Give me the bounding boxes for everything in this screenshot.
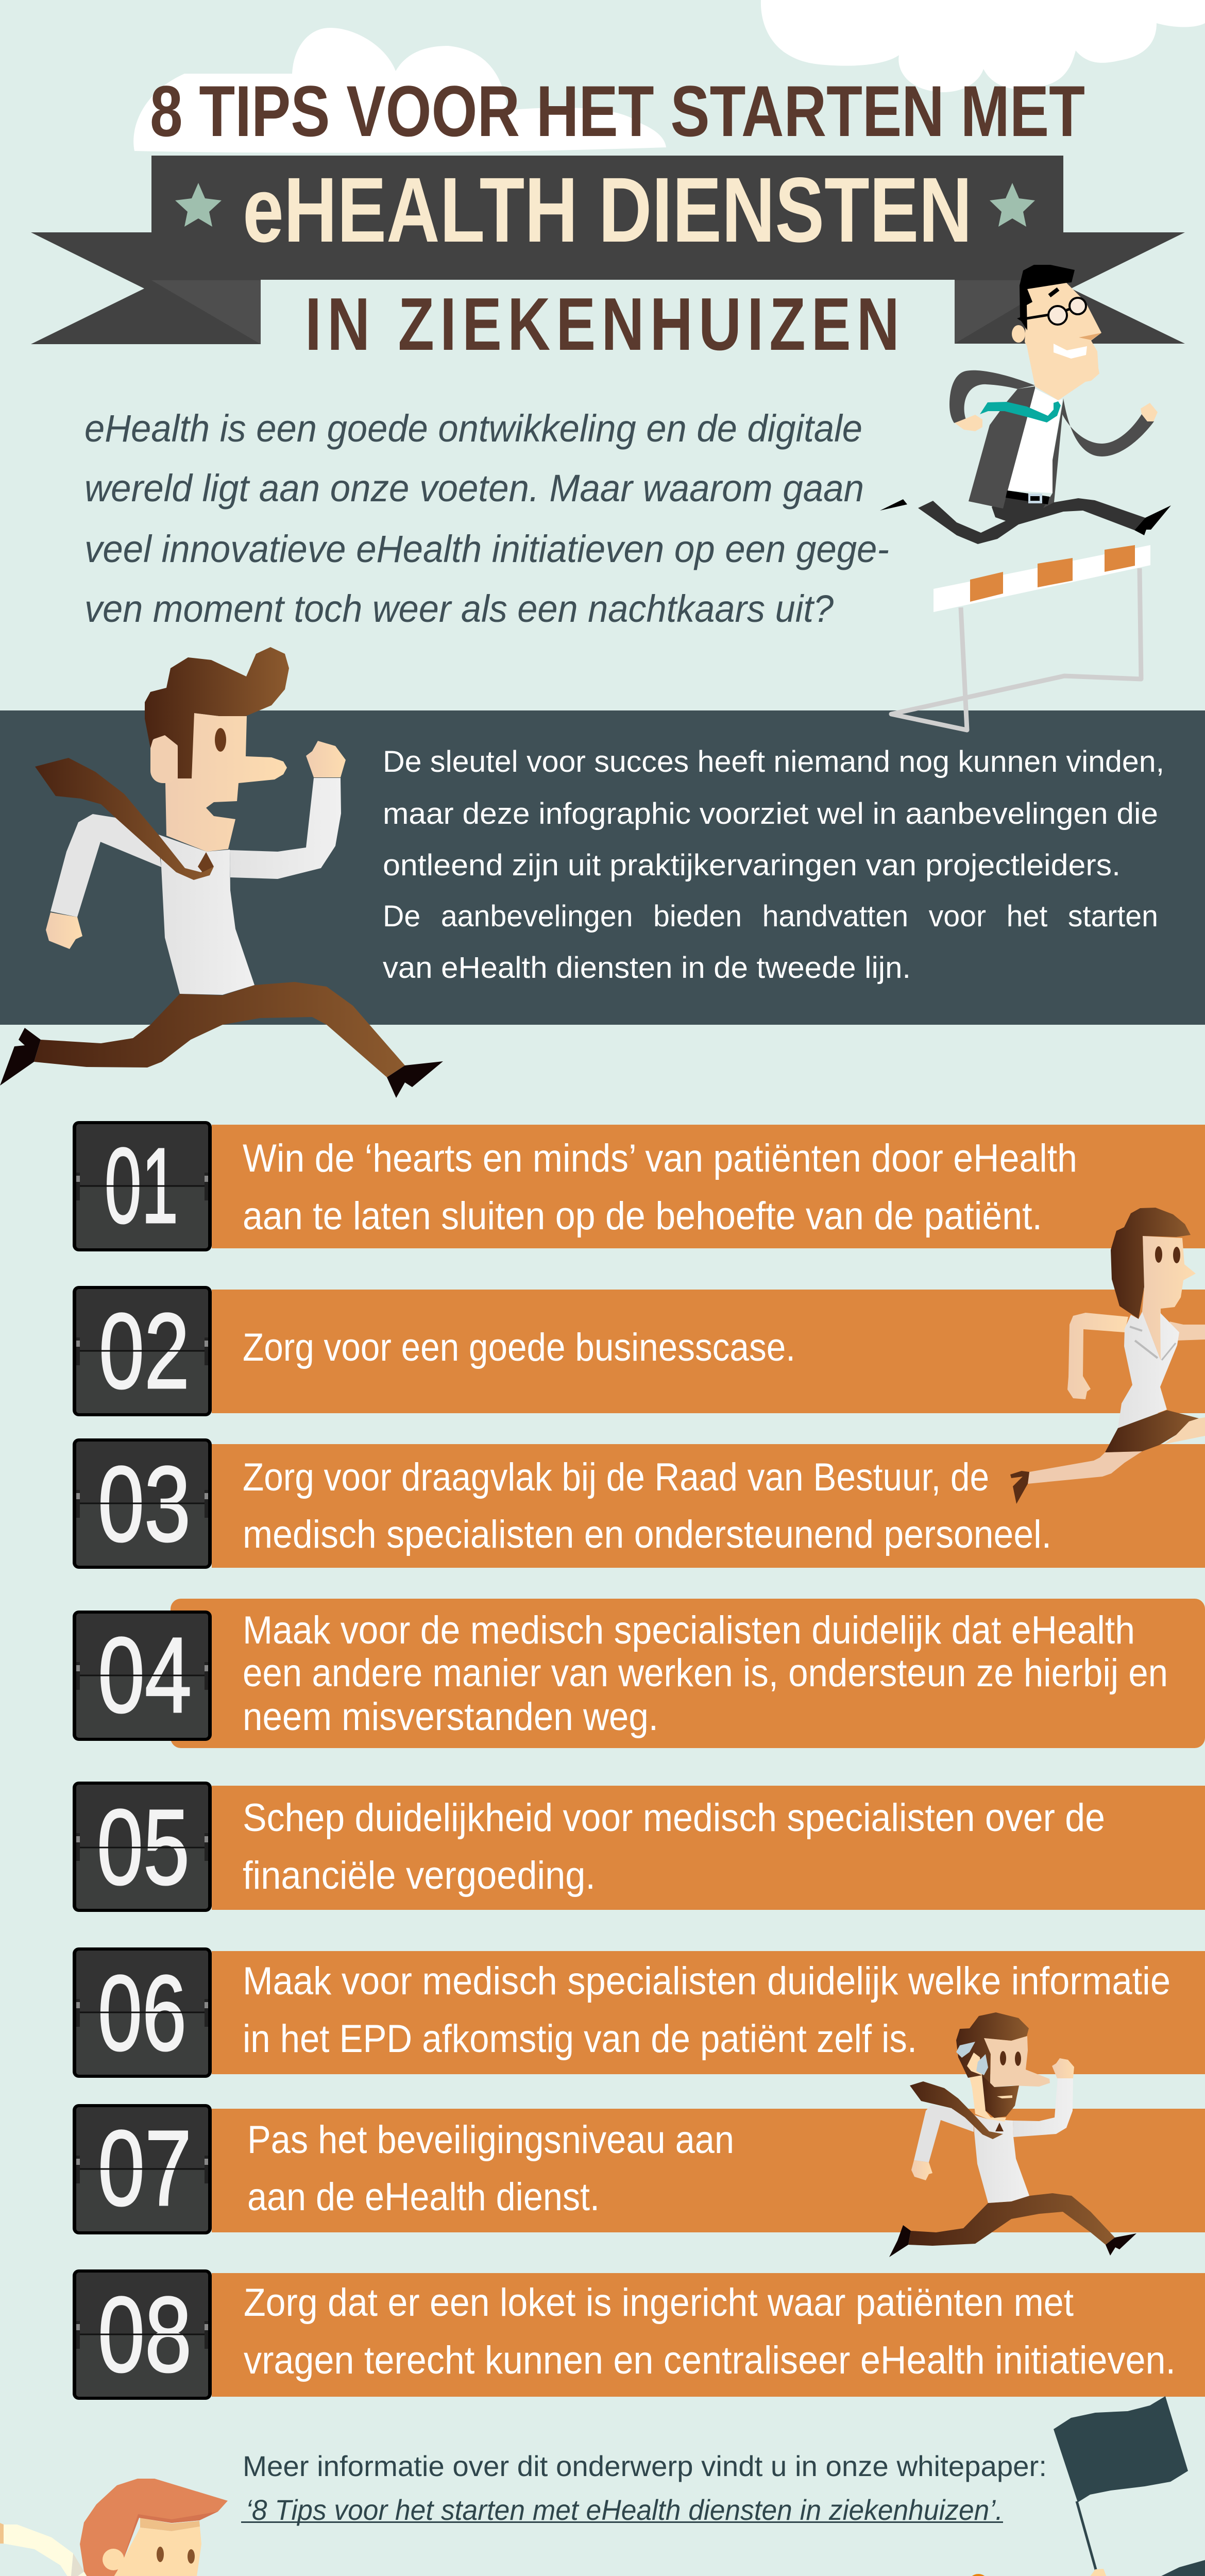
band text: maar deze infographic voorziet wel in aanbevelingen die bbox=[383, 797, 1158, 831]
icon: star left bbox=[175, 183, 222, 227]
tip 5 bbox=[73, 1782, 1205, 1912]
tip 7 bbox=[73, 2104, 1205, 2234]
tip 4 bbox=[73, 1599, 1205, 1748]
intro text bbox=[84, 407, 889, 630]
intro text: eHealth is een goede ontwikkeling en de digitale bbox=[84, 407, 862, 450]
tip 7: aan de eHealth dienst. bbox=[247, 2175, 600, 2219]
tip 1: aan te laten sluiten op de behoefte van de patiënt. bbox=[243, 1194, 1042, 1238]
tip 5: financiële vergoeding. bbox=[243, 1854, 596, 1897]
ribbon banner bbox=[31, 156, 1185, 344]
tip 8: Zorg dat er een loket is ingericht waar patiënten met bbox=[244, 2281, 1074, 2325]
character: orange-haired man bbox=[0, 2479, 228, 2576]
tip 1 bbox=[73, 1121, 1205, 1251]
character: running woman bbox=[1010, 1208, 1205, 1504]
dark band bbox=[0, 710, 1205, 1025]
tip 8 bbox=[73, 2269, 1205, 2400]
heading line 2: eHEALTH DIENSTEN bbox=[243, 158, 972, 261]
tip 4: neem misverstanden weg. bbox=[243, 1695, 658, 1739]
band text: De aanbevelingen bieden handvatten voor het starten bbox=[383, 900, 1158, 933]
footer text: whitepaper bbox=[241, 2450, 1047, 2526]
logo: Nictiz bbox=[790, 2568, 1015, 2576]
intro text: ven moment toch weer als een nachtkaars uit? bbox=[84, 587, 834, 630]
icon: star right bbox=[990, 183, 1035, 227]
tip 2 bbox=[73, 1286, 1205, 1416]
tip 6 bbox=[73, 1947, 1205, 2078]
tip 3: Zorg voor draagvlak bij de Raad van Bestuur, de bbox=[243, 1455, 989, 1499]
heading line 3: IN ZIEKENHUIZEN bbox=[305, 282, 905, 366]
tip 3: medisch specialisten en ondersteunend personeel. bbox=[243, 1513, 1051, 1556]
band text: van eHealth diensten in de tweede lijn. bbox=[383, 951, 911, 985]
tip 7: Pas het beveiligingsniveau aan bbox=[247, 2118, 734, 2162]
tip 2: Zorg voor een goede businesscase. bbox=[243, 1326, 795, 1369]
character: bearded man running bbox=[889, 2012, 1136, 2257]
band text: De sleutel voor succes heeft niemand nog kunnen vinden, bbox=[383, 745, 1164, 778]
intro text: veel innovatieve eHealth initiatieven op een gege- bbox=[84, 528, 889, 570]
footer text: whitepaper: Meer informatie over dit onderwerp vindt u in onze whitepaper: bbox=[243, 2450, 1047, 2482]
cloud left bbox=[133, 28, 666, 153]
tip 3 bbox=[73, 1438, 1205, 1569]
character: hurdling man bbox=[880, 265, 1171, 544]
character: man with flag bbox=[1054, 2396, 1205, 2576]
tip 1: Win de ‘hearts en minds’ van patiënten door eHealth bbox=[243, 1137, 1077, 1180]
footer text: whitepaper: ‘8 Tips voor het starten met eHealth diensten in ziekenhuizen’. bbox=[246, 2494, 1003, 2526]
tip 6: in het EPD afkomstig van de patiënt zelf is. bbox=[243, 2017, 917, 2061]
tip 4: 04 bbox=[98, 1616, 192, 1735]
tip 2: 02 bbox=[99, 1292, 190, 1411]
band text bbox=[383, 745, 1164, 985]
tip 1: 01 bbox=[105, 1126, 178, 1246]
character: brown-haired man running bbox=[0, 647, 443, 1098]
tip 6: 06 bbox=[98, 1954, 186, 2073]
cloud right bbox=[761, 0, 1205, 92]
intro text: wereld ligt aan onze voeten. Maar waarom gaan bbox=[84, 467, 864, 510]
band text: ontleend zijn uit praktijkervaringen van projectleiders. bbox=[383, 849, 1121, 882]
tip 5: 05 bbox=[97, 1788, 190, 1907]
tip 7: 07 bbox=[98, 2109, 192, 2228]
tip 5: Schep duidelijkheid voor medisch specialisten over de bbox=[243, 1796, 1105, 1840]
tip 3: 03 bbox=[98, 1445, 191, 1564]
icon: hurdle bbox=[891, 545, 1150, 730]
tip 4: Maak voor de medisch specialisten duidelijk dat eHealth bbox=[243, 1608, 1135, 1652]
tip 8: 08 bbox=[98, 2275, 192, 2395]
